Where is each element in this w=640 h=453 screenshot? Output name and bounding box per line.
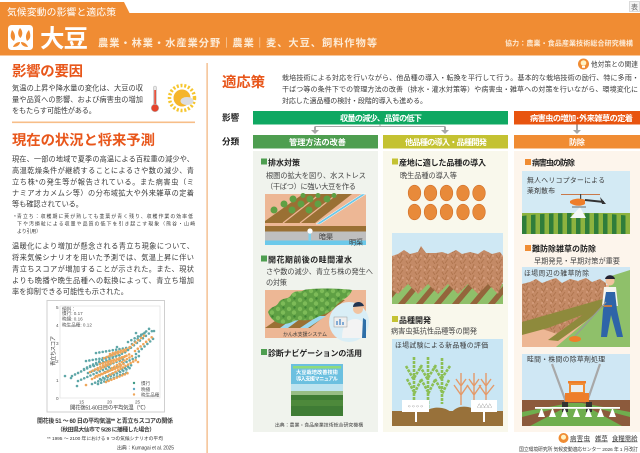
chart stats: 晩生品種: 0.12 [62,322,92,328]
chart legend: 慣行 [141,380,151,387]
manual cover: 大豆栽培改善技術 [296,368,339,376]
causes text: 量や品質への影響、および病害虫の増加 [12,95,143,104]
drainage description [266,171,366,191]
chart caption [37,417,174,452]
adaptation intro text: 栽培技術による対応を行いながら、他品種の導入・転換を平行して行う。基本的な栽培技術の励行、特に多雨・ [282,73,639,82]
illustration: mature field [392,233,503,304]
x axis [70,400,149,412]
category bar: control: 防除 [569,137,586,147]
sector subtitle: 農業・林業・水産業分野｜農業｜麦、大豆、飼料作物等 [98,36,377,50]
label: field evaluation: ほ場試験による新品種の評価 [395,340,488,350]
illustration: weed removal [522,267,630,347]
irrigation description: さや数の減少、青立ち株の発生へ [266,267,373,276]
panel: pest control [514,151,640,432]
illustration: herbicide tractor [522,354,630,426]
status paragraph: 等も確認されている。 [12,200,83,208]
suitable varieties description: 晩生品種の導入等 [400,171,457,180]
y axis: 0 [56,396,59,401]
projection paragraph: よりも晩播や晩生品種への転換によって、青立ち増加 [12,276,194,285]
related topics legend: 病害虫 [570,434,591,442]
status paragraph: 立ち株*の発生等が報告されている。また病害虫（ミ [12,178,194,186]
scatter chart [47,300,164,412]
impact bar: pests and weeds: 病害虫の増加･外来雑草の定着 [530,113,633,123]
category bar: management: 管理方法の改善 [289,137,346,147]
adaptation intro text [282,73,639,105]
manual cover [291,364,343,416]
label: field margin: ほ場周辺の雑草防除 [524,268,589,278]
table tab icon [630,2,640,12]
chart legend [133,380,160,398]
y axis: 4 [56,323,59,328]
chart legend: 晩生品種 [141,391,160,398]
chart caption: ** 1995 〜 2100 年における 9 つの気候シナリオの平均 [47,435,163,442]
manual cover: 導入支援マニュアル [296,374,339,382]
signboard: control variety: ○○○○ [408,404,423,408]
panel: causes [12,62,194,115]
status paragraph: ナミアオカメムシ等）の分布域拡大や外来雑草の定着 [12,188,194,198]
projection paragraph: 将来気候シナリオを用いた予測では、気温上昇に伴い [12,253,194,262]
chart stats [62,306,92,328]
panel: management [253,151,378,432]
related topics legend: 食糧需給 [612,434,638,442]
y axis: 3 [56,341,59,346]
category bar: varieties [383,135,508,148]
spray boom [535,407,620,417]
helicopter [561,194,606,207]
footnote: *青立ち：収穫期に莢が熟しても茎葉が青く残り、収穫作業の効率低 [14,213,193,220]
subheading: suitable varieties: 産地に適した品種の導入 [399,158,486,168]
irrigation description: の対策 [266,278,287,287]
panel: varieties [383,151,508,432]
panel: current status and projections [12,131,195,296]
projection paragraph: 青立ちスコアが増加することが示された。また、現状 [12,264,194,274]
vertical divider [206,63,208,453]
projection paragraph [12,242,194,296]
label: irrigation support system: かん水支援システム [283,331,327,338]
category bar: management [253,135,378,148]
drainage description: 根圏の拡大を図り、水ストレス [266,171,366,180]
impact bar: yield and quality: 収量の減少、品質の低下 [340,113,422,123]
y axis: 青立ちスコア [49,336,57,366]
illustration: drainage [265,193,366,246]
subheading: diagnostic navigation: 診断ナビゲーションの活用 [268,348,362,358]
breeding description: 病害虫抵抗性品種等の開発 [391,326,477,336]
x axis: 15 [79,400,85,404]
illustration: helicopter spraying [522,171,630,234]
row label: impact: 影響 [222,112,240,122]
status paragraph: 現在、一部の地域で夏季の高温による百粒重の減少や、 [12,154,194,164]
drainage description: （干ばつ）に強い大豆を作る [266,182,356,191]
label: underdrain: 暗渠 [319,232,333,241]
farmer [569,275,623,342]
y axis: 2 [56,359,59,364]
subheading: breeding: 品種開発 [399,315,431,325]
chart stats: 晩播: 0.16 [62,316,83,322]
category bar: varieties: 他品種の導入・品種開発 [405,137,488,147]
title: soybean: 大豆 [40,25,88,53]
chart legend: 晩播 [141,386,151,393]
irrigation description [266,267,373,287]
signboard: new variety: △△△△ [477,402,493,408]
related topics legend [558,433,638,443]
y axis: 1 [56,378,59,383]
source note: 出典：農業・食品産業技術総合研究機構 [275,422,363,428]
chart stats: 慣行: 0.17 [62,310,83,317]
heading: adaptation: 適応策 [222,73,266,91]
header tab [0,2,130,18]
causes text: 気温の上昇や降水量の変化は、大豆の収 [12,84,143,92]
adaptation intro text: 対応した適品種の検討・段階的導入も進める。 [282,96,427,105]
tractor [562,381,592,412]
label: interrow herbicide: 畦間・株間の除草剤処理 [527,354,605,364]
illustration: field trial [392,339,503,426]
status paragraph: 高温乾燥条件が継続することによるさや数の減少、青 [12,166,194,175]
header tab: 気候変動の影響と適応策 [7,6,116,18]
impact bar: yield and quality [253,111,508,124]
icon: sun and cloud [170,86,194,110]
projection paragraph: 率を抑制できる可能性も示された。 [12,287,128,296]
arrows from impacts to categories [311,124,581,134]
data dots [64,328,155,387]
chart caption: 開花後 51 〜 60 日の平均気温** と青立ちスコアの関係 [37,417,173,425]
green plants [406,357,450,408]
related topics legend: 雑草 [595,434,608,442]
label: unmanned helicopter: 無人ヘリコプターによる [527,176,605,184]
y axis: 5 [56,305,59,310]
projection paragraph: 温暖化により増加が懸念される青立ち現象について、 [12,242,194,250]
subheading: drainage: 排水対策 [268,158,300,168]
related measures legend: 他対策との関連 [591,60,638,68]
illustration: irrigation [265,288,369,342]
subheading: pest control: 病害虫の防除 [532,158,575,168]
header band [0,13,640,56]
heading: causes: 影響の要因 [12,62,83,80]
footnote: より引用） [17,228,41,235]
x axis: 開花後51-60日目の平均気温（℃） [70,404,149,412]
orange plants [454,373,494,405]
row label: category: 分類 [222,136,240,146]
causes text [12,84,143,115]
status paragraph [12,154,194,208]
subheading: difficult weeds: 難防除雑草の防除 [532,244,596,254]
subheading: irrigation: 開花期前後の畦間灌水 [268,254,352,264]
chart caption: （秋田県大仙市で 5/28 に播種した場合） [57,426,155,434]
label: spraying: 薬剤散布 [527,186,555,195]
adaptation intro text: 干ばつ等の条件下での管理方法の改善（排水・灌水対策等）や病害虫・雑草への対策を行いながら、環境変化に [282,84,638,94]
table tab icon: 表 [631,2,638,12]
publisher credit: 国立環境研究所 気候変動適応センター 2026 年 1 月改訂 [519,446,638,453]
impact bar: pests and weeds [514,111,640,124]
y axis [49,305,59,401]
chart caption: 出典：Kumagai et al. 2025 [117,444,174,452]
x axis: 20 [107,400,113,404]
section divider [12,122,195,123]
chart stats: 傾斜： [62,306,76,312]
x axis: 25 [135,400,141,404]
label: open ditch: 明渠 [349,238,363,246]
weeds description: 早期発見・早期対策が重要 [534,256,620,266]
causes text: をもたらす可能性がある。 [12,106,96,115]
illustration: soybeans [408,185,485,220]
cooperation credit: 協力：農業・食品産業技術総合研究機構 [505,38,633,48]
icon: soybean pods [8,25,33,50]
footnote: 下や汚損粒による収量や品質の低下を引き起こす現象（熊谷・山崎 [17,220,195,228]
heading: status: 現在の状況と将来予測 [12,131,155,149]
footnote [14,213,195,235]
related measures legend [578,58,638,70]
icon: thermometer [151,86,159,112]
category bar: control [514,135,640,148]
